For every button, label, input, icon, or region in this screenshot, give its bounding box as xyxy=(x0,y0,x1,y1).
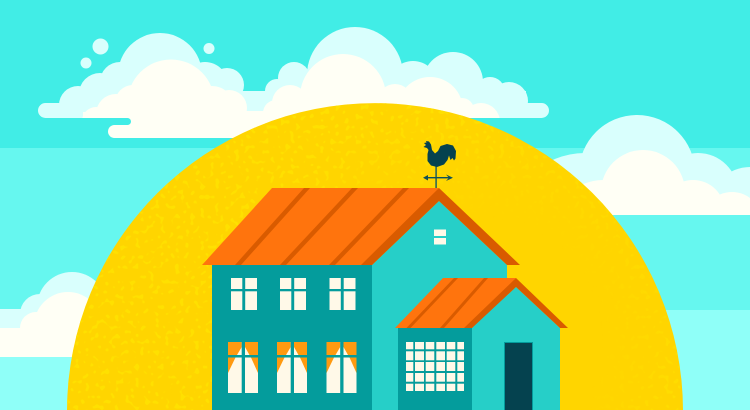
sun speckle texture xyxy=(67,103,683,410)
vane post xyxy=(435,166,437,189)
window 2 xyxy=(280,278,306,310)
cloud back layer xyxy=(265,27,549,123)
house: front extension xyxy=(395,278,568,410)
cloud front layer xyxy=(263,54,500,118)
gable wall xyxy=(372,201,507,410)
cloud back layer xyxy=(553,115,750,198)
cloud back layer xyxy=(0,272,110,342)
upper windows xyxy=(231,278,356,310)
main wall xyxy=(212,265,372,410)
cloud back layer xyxy=(38,33,266,118)
cloud: upper left xyxy=(38,33,280,138)
cloud: right xyxy=(553,115,750,215)
door xyxy=(504,342,533,410)
cloud front layer xyxy=(583,150,750,215)
extension roof xyxy=(395,278,516,328)
window 3 xyxy=(330,278,356,310)
sun xyxy=(67,103,683,410)
window 1 xyxy=(231,278,257,310)
roof stripes xyxy=(235,188,409,265)
extension roof stripes xyxy=(406,278,488,328)
weathervane xyxy=(423,141,456,189)
cloud: lower left xyxy=(0,272,96,357)
main roof xyxy=(202,188,439,265)
extension gable wall xyxy=(472,287,560,410)
cloud front layer xyxy=(0,292,88,357)
attic window xyxy=(434,230,446,244)
window with curtains 2 xyxy=(277,342,307,393)
lower windows with curtains xyxy=(228,342,356,393)
window with curtains 1 xyxy=(228,342,258,393)
window with curtains 3 xyxy=(326,342,356,393)
house: main block xyxy=(202,188,520,410)
cloud: upper centre xyxy=(263,27,549,118)
rooster xyxy=(424,141,456,167)
cloud front layer xyxy=(82,60,280,138)
cloud floating dots xyxy=(80,38,214,68)
vane arrow xyxy=(423,174,453,181)
gable trim xyxy=(361,188,520,265)
grid window xyxy=(406,342,464,391)
extension side wall xyxy=(398,328,472,410)
extension gable trim xyxy=(464,278,568,328)
